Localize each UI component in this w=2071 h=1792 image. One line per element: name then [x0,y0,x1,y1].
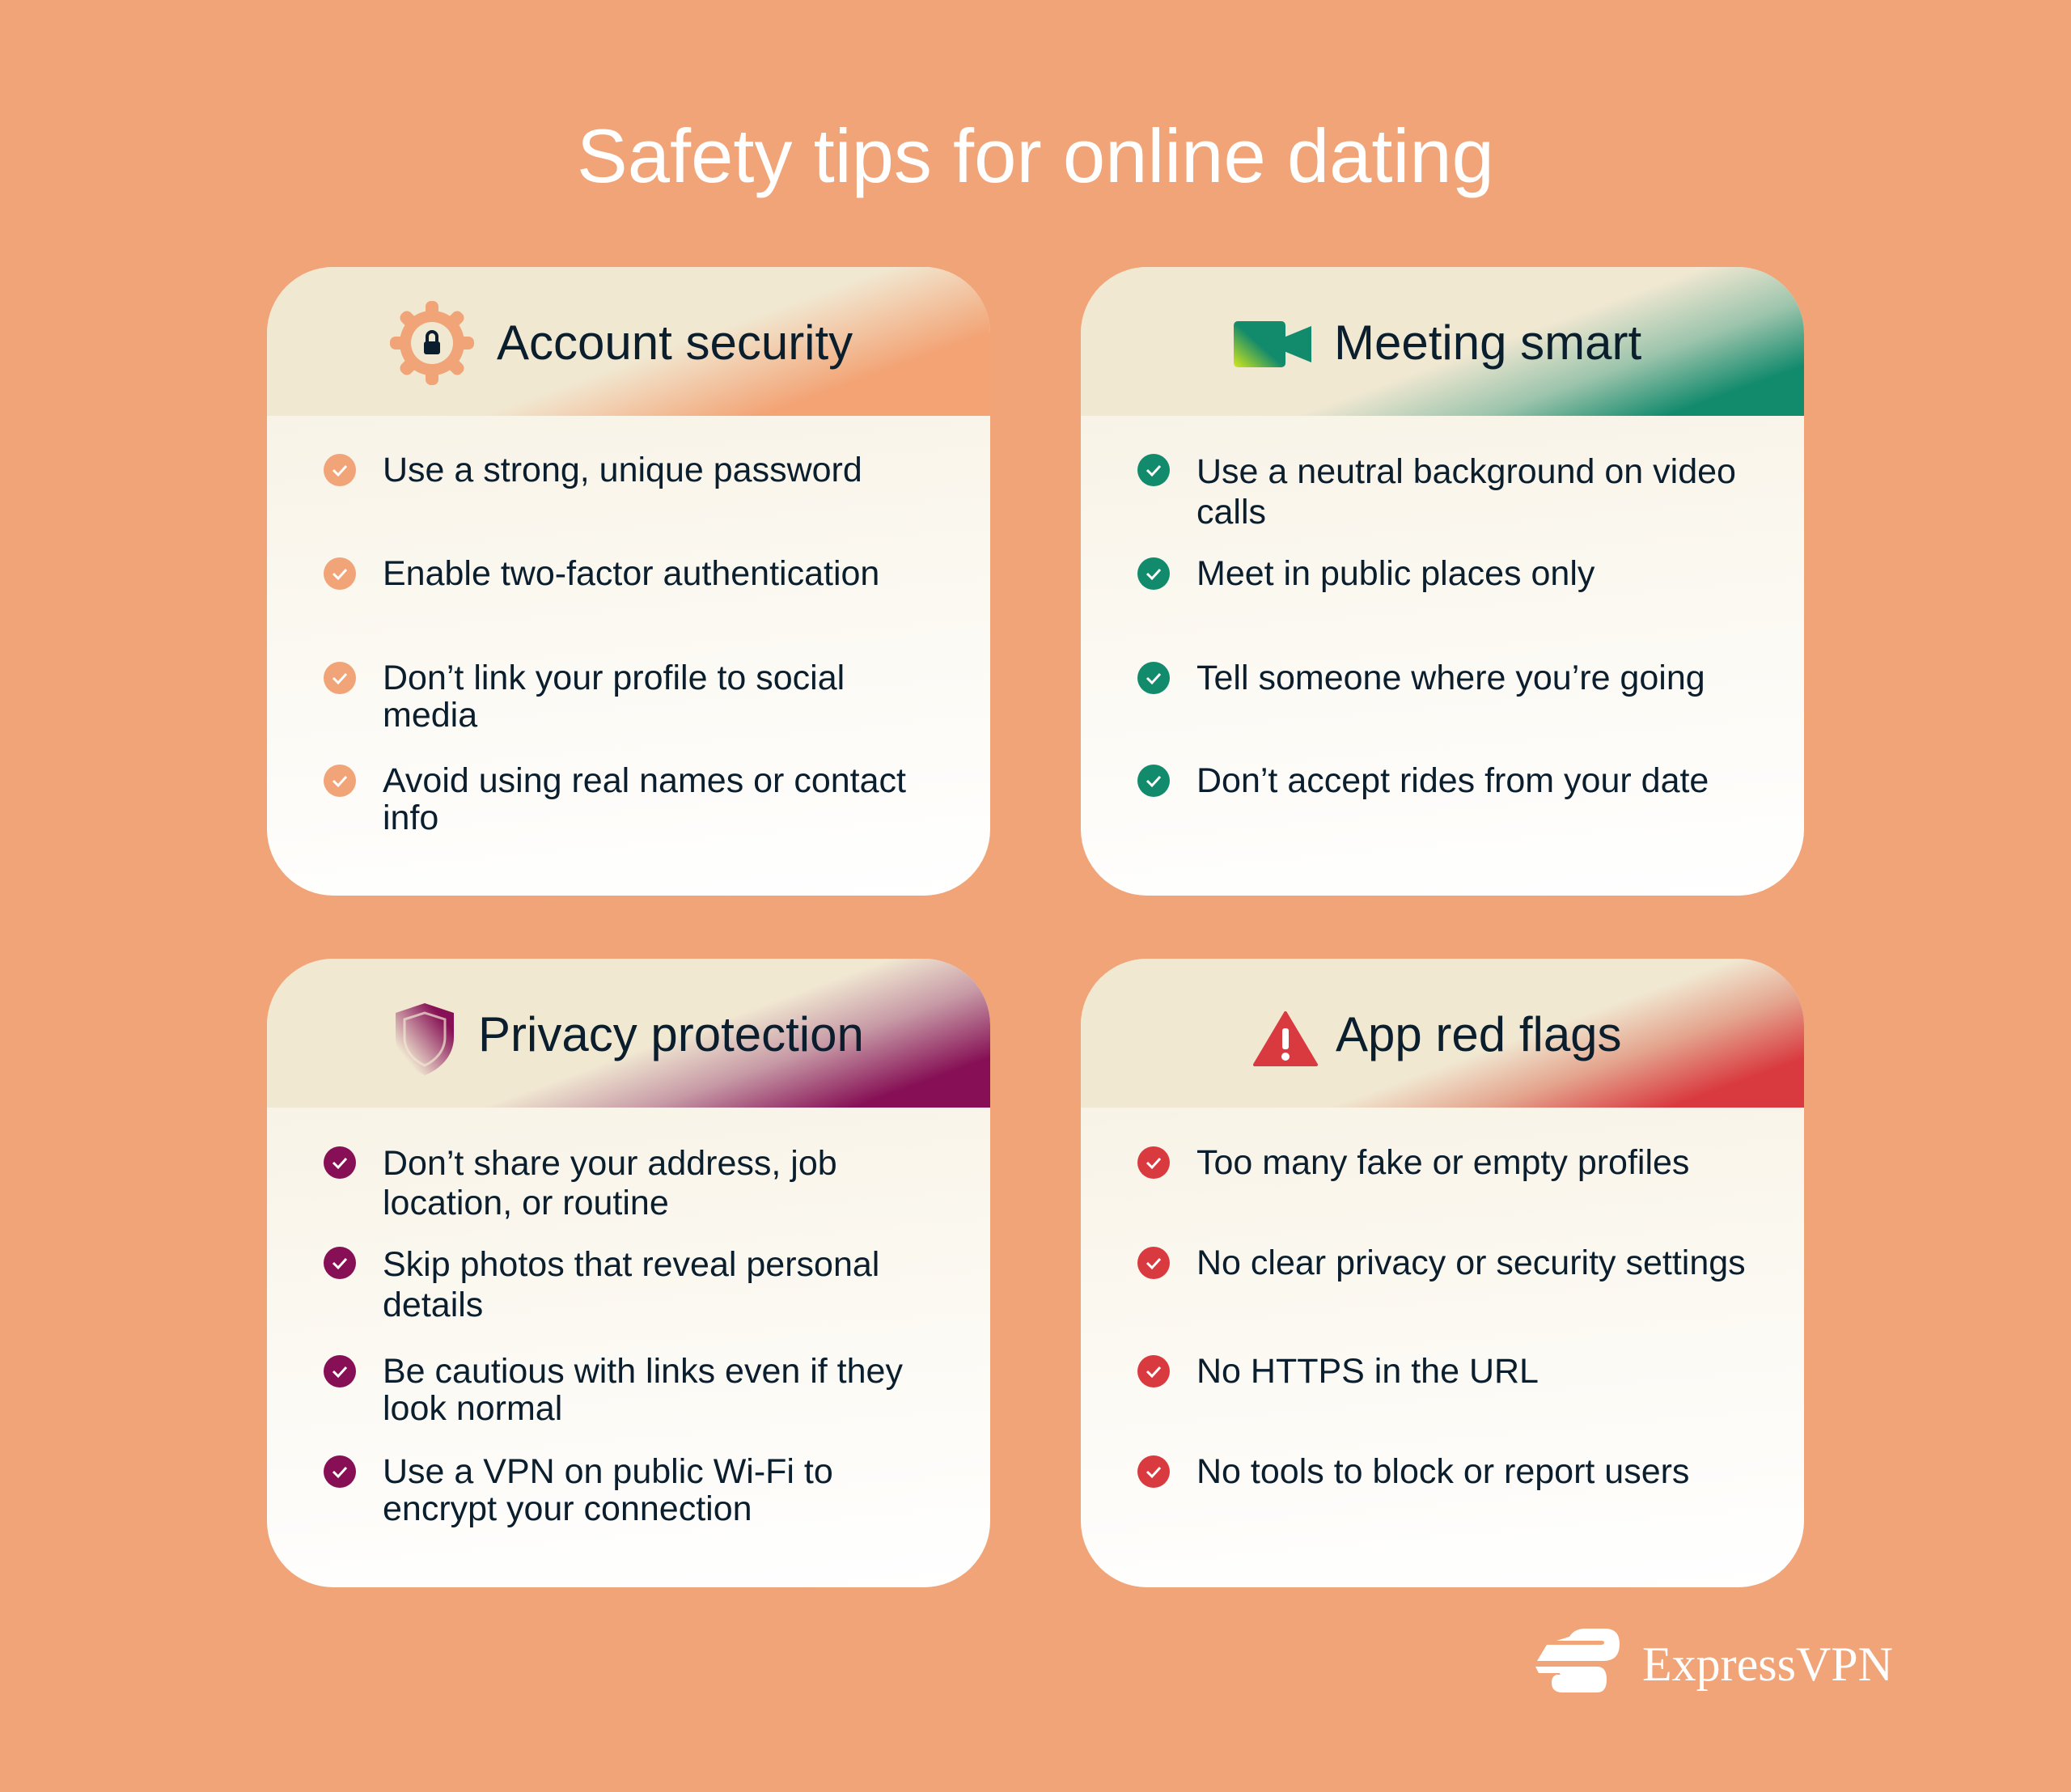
logo: ExpressVPN [1535,1629,1893,1692]
heading: privacy protection: Privacy protection [478,1007,864,1061]
panel: account security: Enable two-factor authentication [383,554,879,593]
header band: account security [267,267,990,416]
panel: privacy protection [267,959,990,1587]
panel: app red flags: No HTTPS in the URL [1196,1352,1539,1391]
panel: meeting smart: Meet in public places only [1196,554,1595,593]
heading: account security: Account security [497,316,853,370]
list: privacy protection: Don’t share your address, job location, or routine [383,1144,837,1222]
heading: meeting smart: Meeting smart [1334,316,1641,370]
panel: account security [267,267,990,896]
panel: privacy protection: Be cautious with links even if they look normal [383,1352,903,1428]
list: app red flags: Too many fake or empty profiles [1196,1143,1689,1182]
panel: account security: Avoid using real names or contact info [383,761,906,837]
header band: meeting smart [1081,267,1804,416]
list: meeting smart: Use a neutral background on video calls [1196,452,1736,532]
panel: app red flags [1081,959,1804,1587]
header band: app red flags [1081,959,1804,1108]
icon: shield [396,1003,454,1075]
title: Safety tips for online dating [577,113,1494,198]
header band: privacy protection [267,959,990,1108]
icon: video camera [1234,321,1311,367]
icon: warning triangle [1253,1011,1318,1066]
wordmark: ExpressVPN [1642,1637,1893,1691]
panel: app red flags: No tools to block or report users [1196,1452,1689,1491]
panel: meeting smart: Don’t accept rides from your date [1196,761,1709,800]
panel: app red flags: No clear privacy or security settings [1196,1243,1746,1282]
panel: meeting smart: Tell someone where you’re going [1196,659,1705,697]
panel: privacy protection: Use a VPN on public Wi-Fi to encrypt your connection [383,1452,833,1528]
heading: app red flags: App red flags [1336,1007,1622,1061]
panel: meeting smart [1081,267,1804,896]
list: account security: Use a strong, unique password [383,451,862,489]
icon: gear with lock [390,301,474,385]
panel: privacy protection: Skip photos that reveal personal details [383,1245,879,1324]
icon: logo mark [1535,1629,1620,1692]
panel: account security: Don’t link your profile to social media [383,659,845,735]
